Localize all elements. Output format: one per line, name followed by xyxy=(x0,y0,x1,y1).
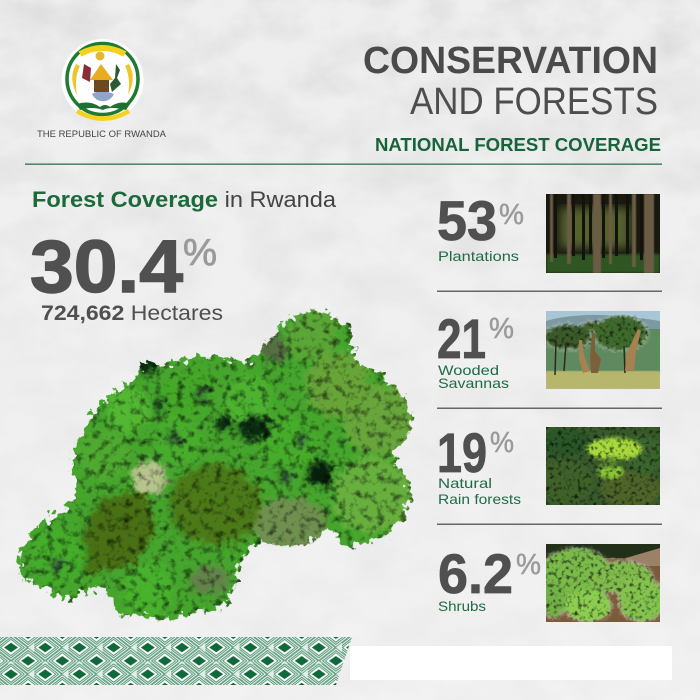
stat: natural rain forests: Rain forests xyxy=(438,491,521,507)
stat: natural rain forests xyxy=(437,421,521,507)
stat: wooded savannas: 21 xyxy=(437,307,486,370)
forest map of Rwanda xyxy=(20,308,412,619)
title: AND FORESTS xyxy=(410,81,658,123)
photo: shrubs xyxy=(546,544,660,622)
white box xyxy=(350,646,672,680)
stat: plantations xyxy=(437,189,524,264)
stat: natural rain forests: 19 xyxy=(437,421,487,484)
heading: forest coverage: Forest Coverage in Rwanda xyxy=(32,187,337,212)
stat: natural rain forests: Natural xyxy=(438,475,492,491)
main stat: 30.4%: 30.4 xyxy=(30,225,183,308)
stat: natural rain forests: % xyxy=(490,427,514,459)
photo: natural rain forest xyxy=(546,427,660,505)
title: CONSERVATION xyxy=(363,40,658,82)
stat: wooded savannas: Savannas xyxy=(438,375,509,391)
photo: plantation forest xyxy=(546,194,660,273)
emblem caption: THE REPUBLIC OF RWANDA xyxy=(37,129,167,140)
stat: shrubs: 6.2 xyxy=(438,542,513,605)
stat: wooded savannas xyxy=(437,307,514,391)
stat: plantations: 53 xyxy=(437,189,497,252)
photo: savanna with giraffes xyxy=(546,311,660,389)
stat: wooded savannas: Wooded xyxy=(438,362,499,378)
stat: plantations: Plantations xyxy=(438,248,519,264)
hectares: 724,662 Hectares xyxy=(41,302,223,325)
stat: shrubs: % xyxy=(516,549,541,581)
stat: shrubs: Shrubs xyxy=(438,598,486,614)
stat: plantations: % xyxy=(499,199,524,231)
stat: shrubs xyxy=(438,542,541,614)
emblem: national coat of arms xyxy=(62,39,144,121)
decorative diamond band xyxy=(0,637,352,685)
title xyxy=(363,40,658,123)
main stat: 30.4%: % xyxy=(183,232,217,274)
stat: wooded savannas: % xyxy=(489,313,514,345)
subtitle: NATIONAL FOREST COVERAGE xyxy=(375,135,661,155)
